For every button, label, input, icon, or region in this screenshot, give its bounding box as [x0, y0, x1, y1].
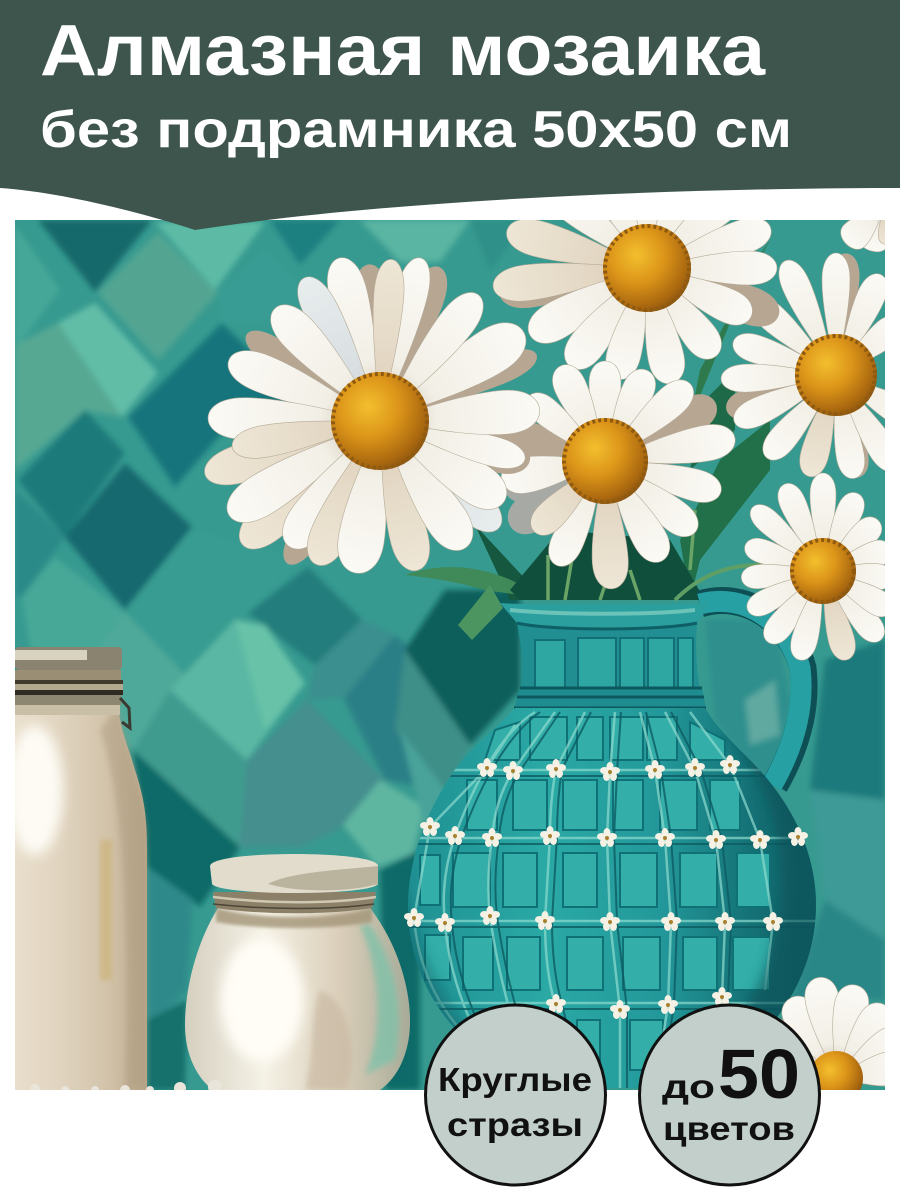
small jar: [185, 854, 410, 1090]
daisy bottom right: [778, 977, 885, 1090]
title: Алмазная мозаика: [40, 11, 766, 91]
badge: up to 50 colours: цветов: [663, 1110, 795, 1147]
teal jug: [395, 601, 825, 1095]
daisy right middle: [721, 252, 900, 481]
bottle, left: [7, 647, 147, 1090]
badge: up to 50 colours: [640, 1005, 820, 1185]
jug handle: [700, 601, 804, 785]
small white flowers on jug: [404, 755, 808, 1019]
pearl beads along bottom edge: [30, 1080, 222, 1090]
header band: [0, 0, 900, 230]
daisy far top right: [840, 220, 885, 252]
daisy right lower: [741, 472, 885, 660]
subtitle: без подрамника 50х50 см: [40, 101, 792, 159]
badge: round rhinestones: стразы: [447, 1106, 583, 1143]
badge: round rhinestones: Круглые: [438, 1061, 592, 1098]
stems and leaves: [405, 240, 770, 640]
painted diamond background: [15, 220, 885, 1090]
daisy top centre: [492, 220, 780, 384]
daisy centre: [494, 359, 738, 590]
badge: up to 50 colours: 50: [718, 1035, 800, 1113]
badge: round rhinestones: [426, 1005, 606, 1185]
daisy large left: [199, 253, 542, 577]
painting: daisies in teal vase: [15, 220, 885, 1090]
badge: up to 50 colours: до: [662, 1068, 715, 1105]
